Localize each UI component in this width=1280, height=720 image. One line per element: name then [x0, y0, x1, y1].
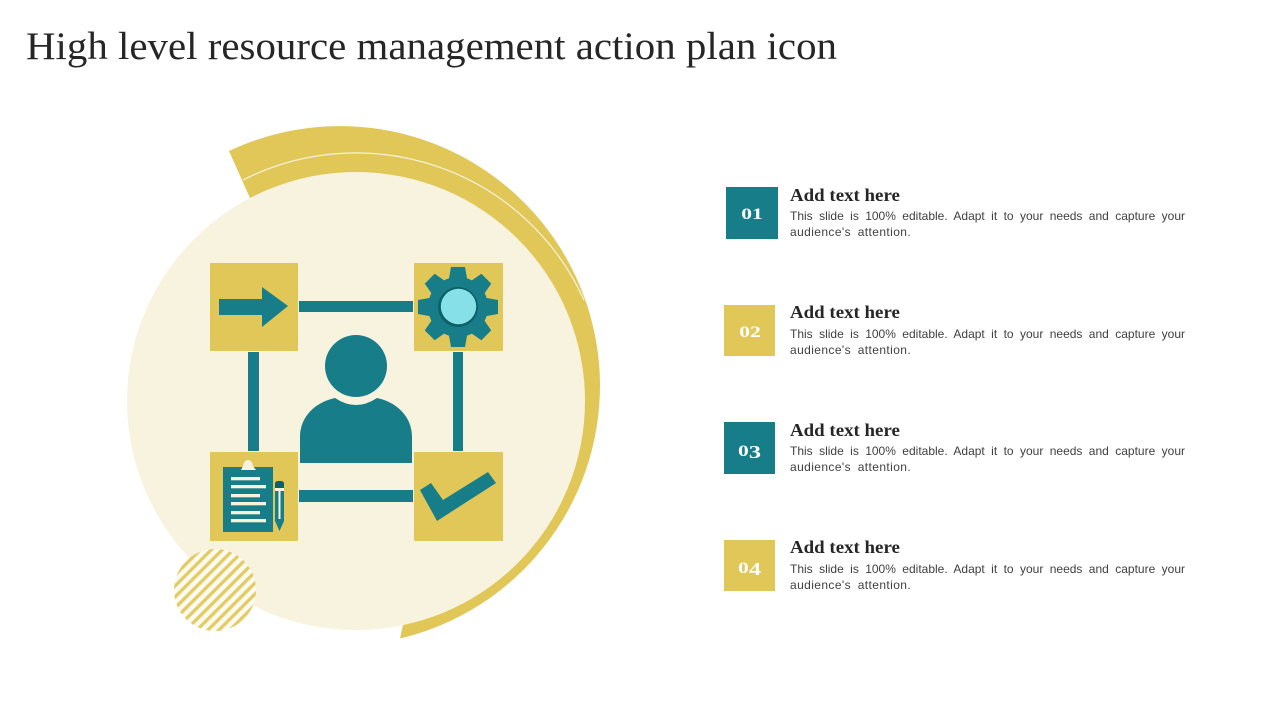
item 03 — [724, 420, 1185, 474]
badge 01: 01 — [741, 206, 763, 223]
heading 02: Add text here — [790, 302, 900, 322]
description 02 — [790, 327, 1185, 357]
description 03: audience's attention. — [790, 460, 911, 474]
cream circle — [127, 172, 585, 630]
description 02: audience's attention. — [790, 343, 911, 357]
description 01: audience's attention. — [790, 225, 911, 239]
yellow outer arc — [229, 126, 600, 638]
badge 01 — [726, 187, 778, 239]
badge 02: 02 — [739, 324, 760, 341]
description 04: audience's attention. — [790, 578, 911, 592]
description 01 — [790, 209, 1185, 239]
icon: gear tile — [414, 263, 503, 351]
main illustration — [127, 126, 600, 638]
connector bars — [248, 301, 463, 502]
icon: arrow tile — [210, 263, 298, 351]
description 03: This slide is 100% editable. Adapt it to your needs and capture your — [790, 444, 1185, 458]
striped circle — [174, 549, 256, 631]
badge 02 — [724, 305, 775, 356]
description 03 — [790, 444, 1185, 474]
icon: person — [300, 335, 412, 463]
title: High level resource management action plan icon — [26, 25, 837, 68]
badge 04 — [724, 540, 775, 591]
badge 03 — [724, 422, 775, 474]
item 01 — [726, 185, 1185, 239]
description 02: This slide is 100% editable. Adapt it to your needs and capture your — [790, 327, 1185, 341]
badge 04: 04 — [738, 559, 761, 579]
item 04 — [724, 537, 1185, 592]
description 01: This slide is 100% editable. Adapt it to your needs and capture your — [790, 209, 1185, 223]
badge 03: 03 — [738, 442, 761, 462]
heading 01: Add text here — [790, 185, 900, 205]
heading 04: Add text here — [790, 537, 900, 557]
icon: clipboard tile — [210, 452, 298, 541]
description 04: This slide is 100% editable. Adapt it to your needs and capture your — [790, 562, 1185, 576]
item 02 — [724, 302, 1185, 357]
icon: check tile — [414, 452, 503, 541]
heading 03: Add text here — [790, 420, 900, 440]
description 04 — [790, 562, 1185, 592]
